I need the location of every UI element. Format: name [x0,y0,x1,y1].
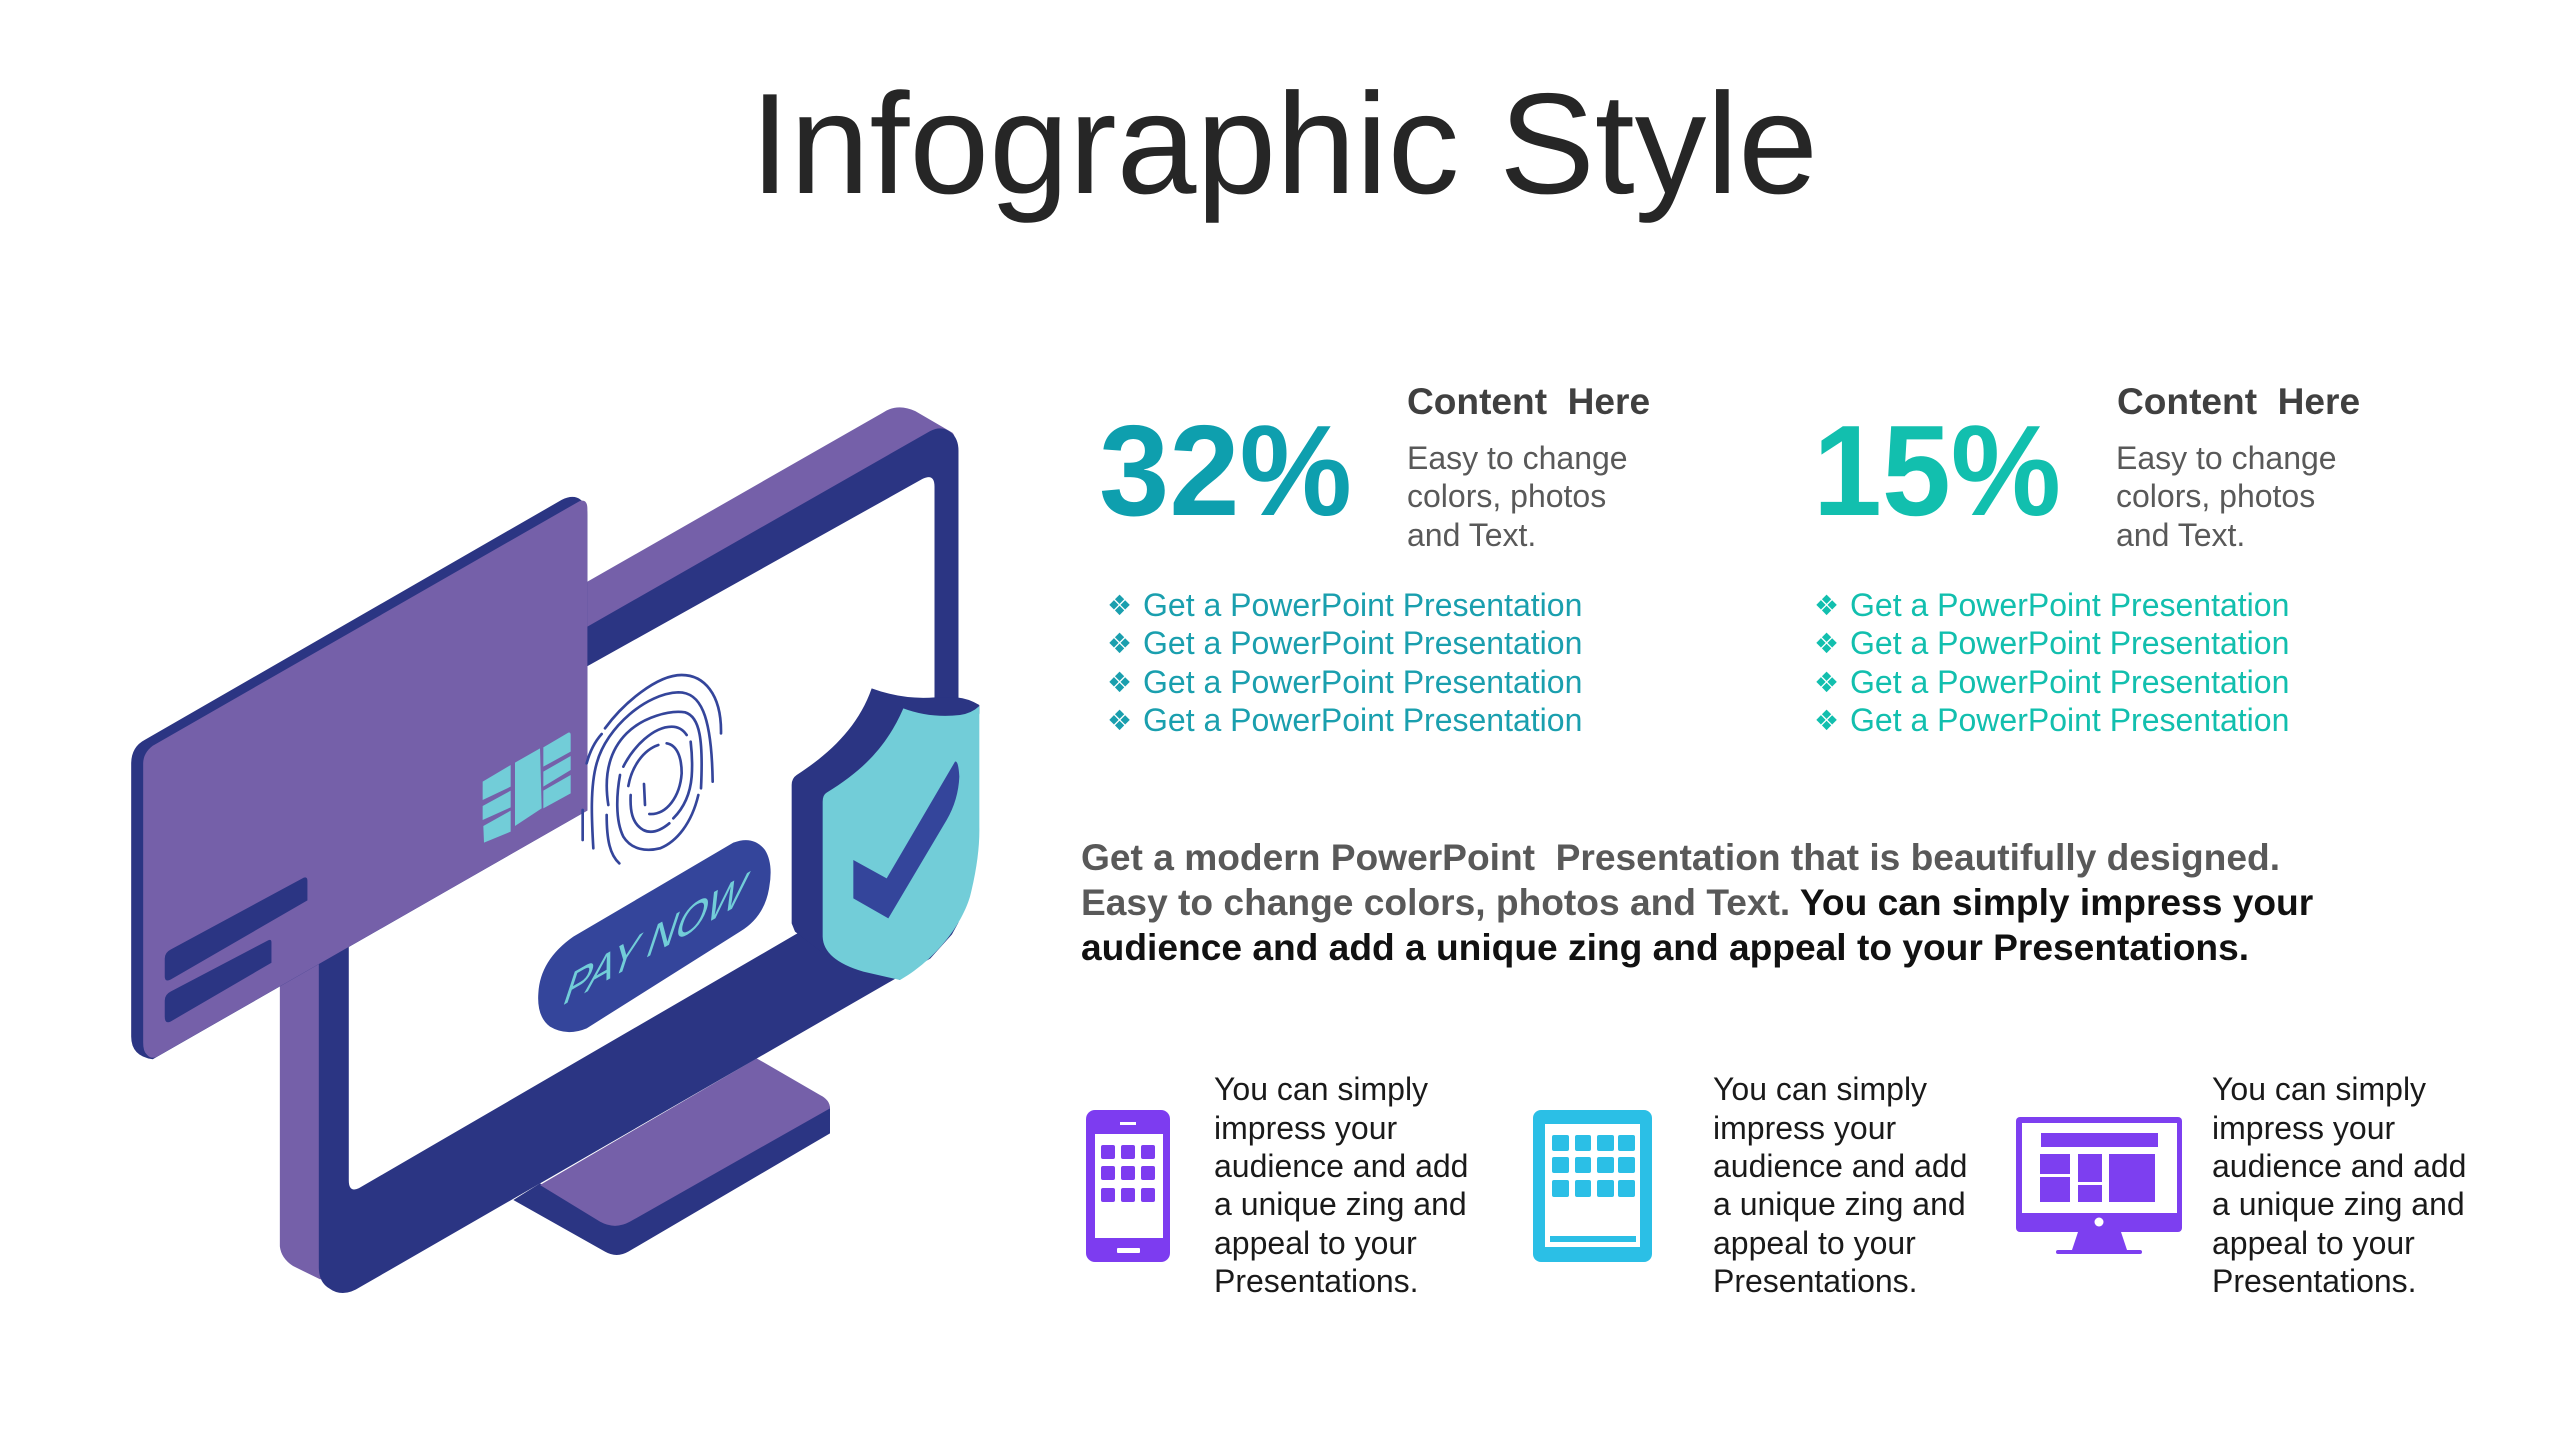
text: phone caption: a unique zing and [1214,1186,1467,1222]
content block: right description [2116,440,2337,553]
bullet list: right [1814,587,2289,738]
bullet list: right: Get a PowerPoint Presentation [1850,702,2289,738]
content block: left description [1407,440,1628,553]
text: tablet caption: impress your [1713,1110,1896,1146]
text: desktop caption: You can simply [2212,1071,2426,1107]
text: tablet caption [1713,1071,1967,1299]
monitor frame [319,428,958,1293]
content block: left description: and Text. [1407,517,1536,553]
monitor screen [349,477,935,1189]
text: desktop caption: impress your [2212,1110,2396,1146]
shield [792,688,979,980]
bullet list: left: ❖ [1107,627,1132,660]
bullet list: left [1107,587,1582,738]
stat: 15%: 15% [1813,399,2061,543]
text: phone caption [1214,1071,1468,1299]
bullet list: left: Get a PowerPoint Presentation [1143,587,1582,623]
bullet list: right: ❖ [1814,704,1839,737]
monitor side [280,920,352,1279]
text: phone caption: impress your [1214,1110,1398,1146]
bullet list: right: Get a PowerPoint Presentation [1850,625,2289,661]
icon: phone [1086,1110,1170,1262]
text: tablet caption: Presentations. [1713,1263,1918,1299]
bullet list: left: Get a PowerPoint Presentation [1143,702,1582,738]
text: desktop caption [2212,1071,2466,1299]
bullet list: right: ❖ [1814,627,1839,660]
title: Infographic Style [750,64,1818,224]
text: phone caption: appeal to your [1214,1225,1417,1261]
text: desktop caption: a unique zing and [2212,1186,2465,1222]
illustration: monitor with card and shield [131,407,979,1293]
content block: left description: colors, photos [1407,478,1606,514]
text: tablet caption: appeal to your [1713,1225,1916,1261]
text: desktop caption: Presentations. [2212,1263,2417,1299]
bullet list: right: Get a PowerPoint Presentation [1850,587,2289,623]
bullet list: left: ❖ [1107,589,1132,622]
text: phone caption: audience and add [1214,1148,1468,1184]
text: tablet caption: audience and add [1713,1148,1967,1184]
icon: tablet [1533,1110,1652,1262]
bullet list: left: Get a PowerPoint Presentation [1143,625,1582,661]
card chip [483,733,571,843]
check mark [853,762,959,918]
bullet list: left: ❖ [1107,666,1132,699]
summary paragraph: audience and add a unique zing and appeal to your Presentations. [1081,926,2249,968]
content block: right description: and Text. [2116,517,2245,553]
bullet list: left: ❖ [1107,704,1132,737]
pay now label: PAY NOW [557,861,755,1018]
text: tablet caption: a unique zing and [1713,1186,1966,1222]
content block: left description: Easy to change [1407,440,1628,476]
fingerprint [583,675,721,863]
text: desktop caption: audience and add [2212,1148,2466,1184]
card stripes [165,877,307,1022]
icon: desktop monitor [2016,1117,2182,1254]
text: phone caption: Presentations. [1214,1263,1419,1299]
summary paragraph: Easy to change colors, photos and Text. You can simply impress your [1081,881,2313,923]
credit card [131,497,587,1059]
text: phone caption: You can simply [1214,1071,1428,1107]
content block: right description: Easy to change [2116,440,2337,476]
pay now button [538,840,771,1032]
content block: left heading: Content Here [1407,380,1650,422]
bullet list: left: Get a PowerPoint Presentation [1143,664,1582,700]
content block: right description: colors, photos [2116,478,2315,514]
summary paragraph [1081,836,2313,968]
monitor base [513,1058,830,1255]
stat: 32%: 32% [1099,399,1352,543]
bullet list: right: ❖ [1814,589,1839,622]
bullet list: right: Get a PowerPoint Presentation [1850,664,2289,700]
text: tablet caption: You can simply [1713,1071,1927,1107]
content block: right heading: Content Here [2117,380,2360,422]
text: desktop caption: appeal to your [2212,1225,2415,1261]
monitor top edge [587,407,954,638]
summary paragraph: Get a modern PowerPoint Presentation that is beautifully designed. [1081,836,2280,878]
bullet list: right: ❖ [1814,666,1839,699]
